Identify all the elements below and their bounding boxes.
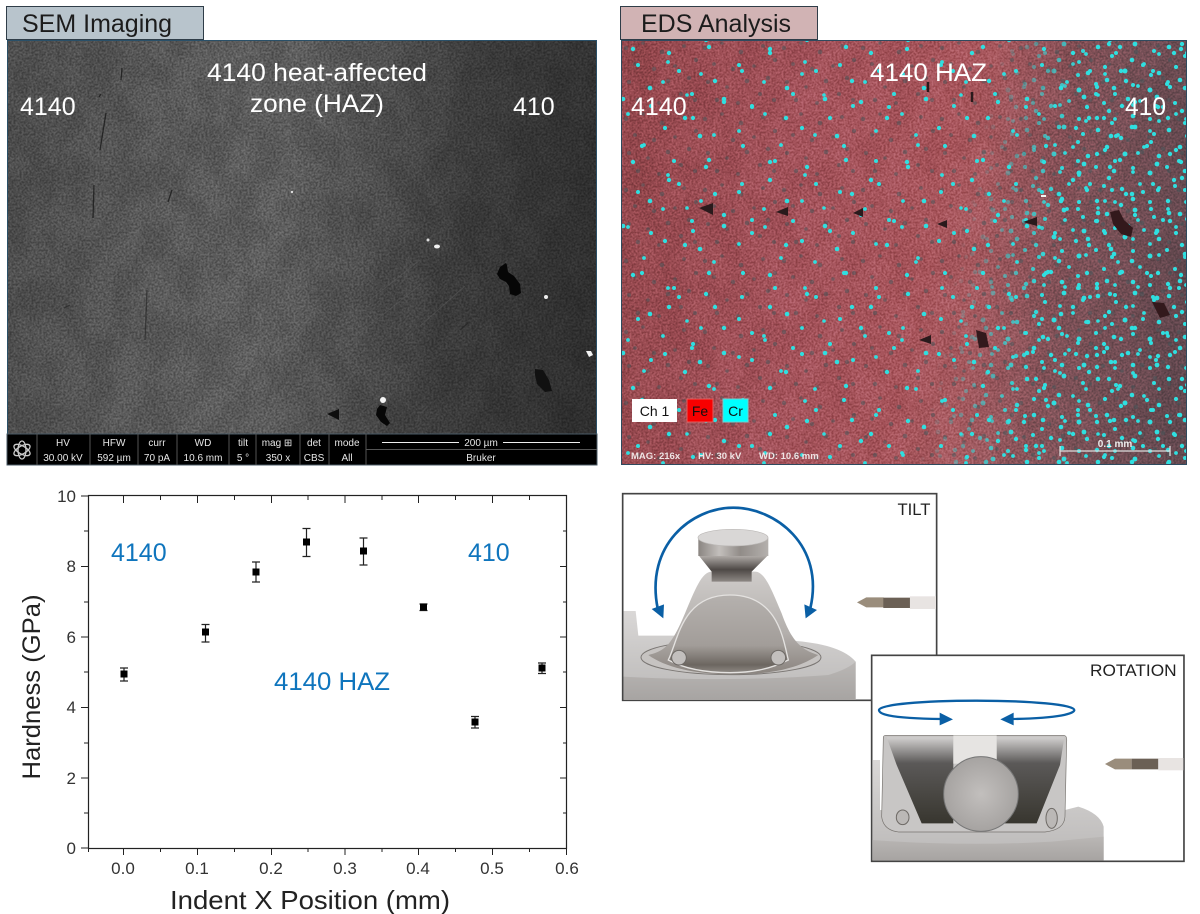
icon: atom logo — [12, 441, 32, 459]
label: 4140 heat-affected zone (HAZ): 4140 heat-affected — [207, 59, 427, 87]
y axis title: Hardness (GPa) — [18, 594, 46, 780]
x tick labels: 0.3 — [333, 859, 357, 878]
heading: EDS Analysis tab — [620, 6, 818, 40]
x tick labels: 0.6 — [555, 859, 579, 878]
SEM status bar: 200 µm — [464, 438, 498, 449]
x tick labels: 0.5 — [480, 859, 504, 878]
SEM status bar: 5 ° — [237, 453, 249, 464]
y tick labels: 4 — [67, 698, 76, 717]
y tick labels — [57, 487, 76, 858]
legend: channels: Ch 1 — [640, 403, 669, 419]
SEM status bar: 70 pA — [144, 453, 170, 464]
panel: TILT stage — [623, 494, 937, 700]
screws — [672, 650, 686, 665]
chart: hardness vs indent position — [18, 487, 579, 914]
EDS acquisition data: WD: 10.6 mm — [759, 451, 819, 462]
x tick labels: 0.4 — [406, 859, 430, 878]
SEM status bar: WD — [195, 438, 211, 449]
stage recess — [641, 640, 821, 675]
arrow: tilt arc — [652, 508, 817, 618]
label: 4140 heat-affected zone (HAZ): zone (HAZ) — [250, 90, 384, 118]
heading: SEM Imaging tab: SEM Imaging — [22, 10, 172, 38]
SEM status bar: tilt — [238, 438, 248, 449]
stub top — [698, 529, 768, 546]
nanoindenter tip — [1105, 758, 1183, 770]
panel: SEM micrograph — [7, 40, 597, 465]
stub cone and neck — [698, 555, 768, 582]
SEM status bar: 10.6 mm — [184, 453, 222, 464]
legend: channels: Cr — [728, 403, 743, 419]
stub cylinder — [698, 538, 768, 556]
scale bar: 0.1 mm — [1060, 439, 1170, 456]
stub disc — [944, 757, 1018, 831]
y tick labels: 6 — [67, 628, 76, 647]
scale bar: 0.1 mm: 0.1 mm — [1098, 439, 1132, 450]
legend: channels — [632, 399, 748, 422]
x tick labels: 0.1 — [185, 859, 209, 878]
SEM status bar: 592 µm — [97, 453, 131, 464]
label: TILT: TILT — [897, 500, 930, 519]
annotation: 4140: 4140 — [111, 539, 167, 567]
label: 4140: 4140 — [20, 93, 76, 121]
x tick labels — [111, 859, 579, 878]
panel: EDS map — [621, 40, 1187, 465]
label: ROTATION: ROTATION — [1090, 661, 1177, 680]
y tick labels: 0 — [67, 839, 76, 858]
SEM status bar: mag ⊞ — [262, 438, 292, 449]
screws — [896, 810, 909, 825]
SEM status bar: CBS — [304, 453, 325, 464]
SEM status bar: mode — [334, 438, 360, 449]
dark wing faces — [887, 737, 1064, 823]
stage dome — [648, 572, 818, 674]
label: 4140: 4140 — [631, 93, 687, 121]
heading: EDS Analysis tab: EDS Analysis — [641, 10, 791, 38]
SEM status bar: HV — [56, 438, 70, 449]
dome front plate — [668, 595, 788, 673]
SEM status bar: 350 x — [266, 453, 290, 464]
EDS acquisition data: MAG: 216x — [631, 451, 681, 462]
axis ticks — [81, 496, 567, 855]
stage base — [624, 611, 856, 700]
panel: ROTATION stage — [872, 655, 1184, 861]
SEM status bar: Bruker — [466, 453, 496, 464]
SEM status bar: 30.00 kV — [43, 453, 83, 464]
label: 410: 410 — [513, 93, 555, 121]
heading: SEM Imaging tab — [6, 6, 204, 40]
annotation: 4140 HAZ: 4140 HAZ — [274, 668, 390, 696]
nanoindenter tip — [857, 596, 936, 609]
legend: channels: Fe — [692, 403, 708, 419]
x tick labels: 0.0 — [111, 859, 135, 878]
EDS acquisition data: HV: 30 kV — [698, 451, 742, 462]
annotation: 410: 410 — [468, 539, 510, 567]
y tick labels: 2 — [67, 769, 76, 788]
x tick labels: 0.2 — [259, 859, 283, 878]
y tick labels: 8 — [67, 557, 76, 576]
y tick labels: 10 — [57, 487, 76, 506]
label: 410: 410 — [1125, 93, 1166, 121]
label: 4140 HAZ: 4140 HAZ — [870, 59, 987, 87]
SEM status bar — [7, 434, 597, 465]
stage body — [882, 735, 1067, 832]
SEM status bar: All — [341, 453, 353, 464]
arrow: rotation ellipse — [879, 701, 1074, 725]
center stub slot — [953, 735, 997, 764]
data points with error bars — [120, 528, 546, 728]
SEM status bar: det — [307, 438, 321, 449]
stage base — [872, 760, 1104, 860]
SEM status bar: HFW — [103, 438, 126, 449]
SEM status bar: curr — [148, 438, 166, 449]
